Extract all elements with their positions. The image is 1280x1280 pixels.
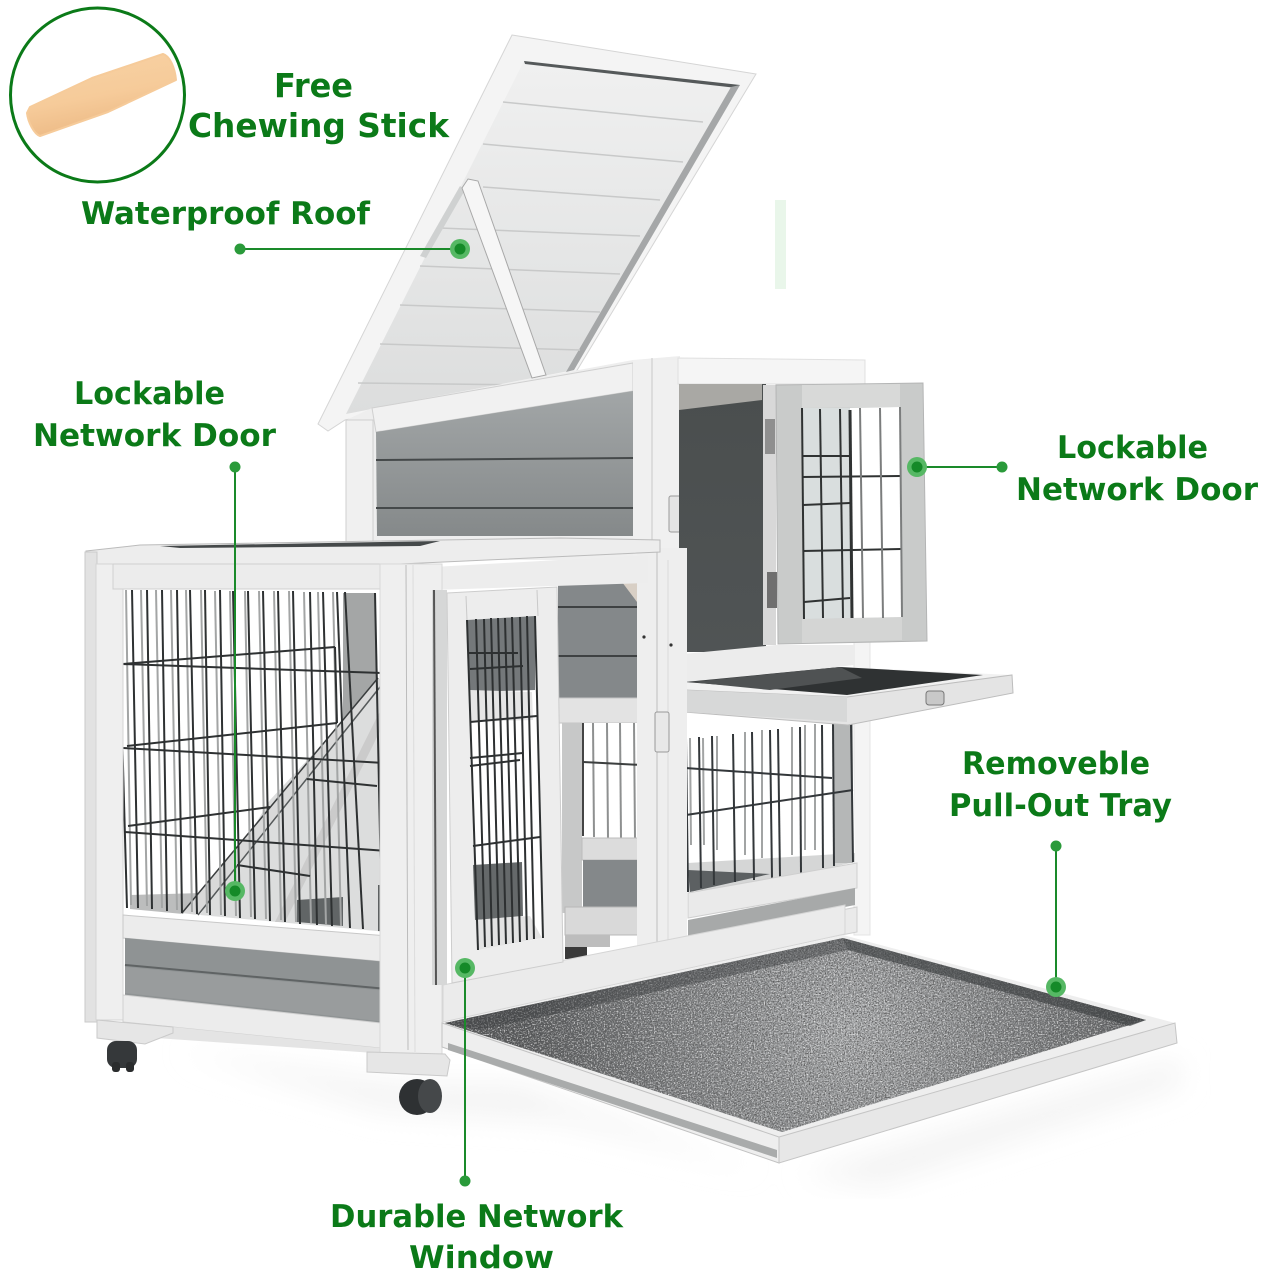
central post — [637, 548, 687, 966]
label: right lockable network door: Network Door — [1016, 472, 1259, 508]
ground shadows — [180, 1050, 1180, 1185]
lower base board between door and tray — [443, 905, 845, 1022]
lower left front frame — [85, 552, 390, 1054]
open roof panel — [318, 35, 756, 431]
lower grey panels — [125, 938, 388, 1024]
callout: tray leader — [1046, 840, 1066, 997]
label: removable pull-out tray: Pull-Out Tray — [949, 788, 1172, 824]
heading: free chewing stick: Free — [274, 66, 353, 105]
feet and casters — [97, 1020, 450, 1115]
small pull-out tray — [685, 667, 1013, 725]
upper house front — [346, 356, 683, 560]
upper open door with wire grid — [776, 383, 927, 644]
label: durable network window: Window — [409, 1240, 554, 1276]
hinged door with wires — [447, 587, 563, 983]
label: removable pull-out tray — [949, 746, 1172, 824]
center opening behind posts — [562, 723, 645, 959]
label: durable network window — [330, 1199, 624, 1276]
large pull-out tray — [442, 935, 1177, 1163]
label: waterproof roof: Waterproof Roof — [81, 196, 371, 232]
lower left top board — [86, 538, 660, 590]
lower right cage — [685, 723, 857, 965]
roof support strut — [420, 179, 546, 378]
center grey panel — [558, 582, 640, 723]
label: left lockable network door: Network Door — [33, 418, 277, 454]
grey siding panel — [376, 391, 633, 536]
callout: right door leader — [907, 457, 1008, 477]
ramp inside cage — [182, 678, 384, 915]
latch — [669, 496, 683, 532]
heading: free chewing stick: Chewing Stick — [188, 106, 450, 145]
label: right lockable network door — [1016, 430, 1259, 508]
heading: free chewing stick — [188, 66, 450, 145]
label: durable network window: Durable Network — [330, 1199, 624, 1235]
faint green stripe artifact — [775, 200, 786, 289]
callout: window leader — [455, 958, 475, 1186]
lower left cage interior — [118, 589, 388, 932]
label: left lockable network door — [33, 376, 277, 454]
back wire layer — [126, 590, 341, 926]
lower right rails and strip — [688, 863, 857, 918]
label: right lockable network door: Lockable — [1057, 430, 1208, 466]
front wire layer — [118, 589, 387, 932]
label: removable pull-out tray: Removeble — [962, 746, 1150, 782]
callout: left door leader — [225, 462, 245, 901]
upper right open compartment — [678, 358, 870, 935]
label: left lockable network door: Lockable — [74, 376, 225, 412]
corner post — [380, 564, 447, 1054]
callout: roof leader — [234, 239, 470, 259]
icon: chewing stick in circle — [10, 8, 184, 182]
